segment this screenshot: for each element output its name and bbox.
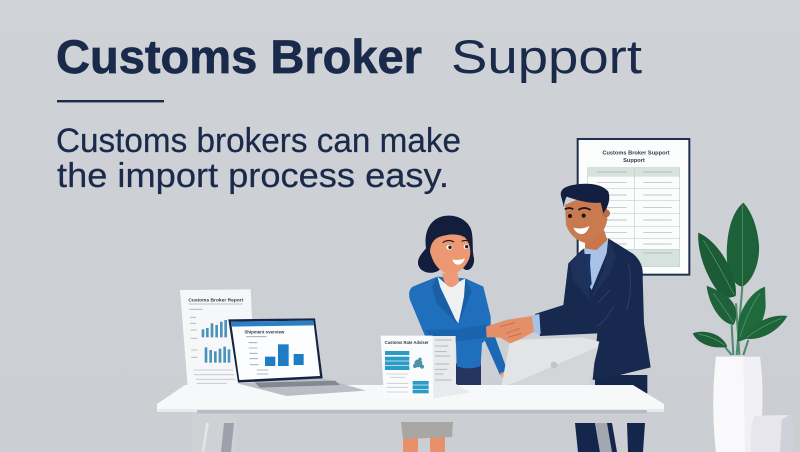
- subtitle text: the import process easy.: [57, 157, 449, 195]
- plant leaves: [727, 203, 759, 287]
- woman hand on table: [500, 371, 508, 382]
- man shirt and tie: [582, 238, 608, 290]
- report on desk with charts: [180, 289, 255, 391]
- white vase: [713, 357, 763, 452]
- man trousers: [595, 375, 647, 393]
- man face: [565, 197, 607, 243]
- woman blouse: [437, 277, 465, 323]
- table legs: [192, 412, 236, 452]
- open laptop: [228, 318, 366, 396]
- man hair: [561, 184, 609, 213]
- wall poster: [578, 139, 689, 275]
- subtitle text: [56, 122, 461, 195]
- report on desk with charts: Customs Broker Report: [188, 297, 244, 302]
- man neck: [585, 230, 607, 250]
- woman jacket: [409, 277, 491, 368]
- woman: [409, 216, 508, 385]
- man jacket: [535, 238, 651, 380]
- laptop base: [237, 378, 366, 396]
- brochure globe icon: [413, 358, 424, 369]
- title: Customs Broker: [56, 30, 422, 83]
- man: [532, 184, 651, 393]
- woman trousers: [456, 363, 481, 385]
- title: [56, 30, 642, 83]
- title: Support: [451, 30, 642, 83]
- woman smile and eyes: [452, 258, 465, 265]
- handshake: [486, 316, 534, 343]
- man lapels: [570, 248, 590, 301]
- man cuff: [532, 314, 541, 334]
- laptop screen: [228, 318, 323, 383]
- man legs: [575, 423, 645, 452]
- subtitle text: Customs brokers can make: [56, 122, 461, 160]
- desk: [157, 385, 664, 414]
- woman hair back: [418, 216, 474, 273]
- front laptop: [474, 337, 599, 392]
- laptop bar chart: [265, 344, 304, 366]
- divider rule: [57, 100, 164, 102]
- plant stems: [723, 287, 748, 355]
- woman far arm: [480, 325, 507, 375]
- brochure on desk: [381, 336, 471, 398]
- potted plant: [693, 203, 793, 452]
- brochure on desk: Customs Rate Adviser: [385, 340, 429, 345]
- small white box: [751, 415, 793, 452]
- woman face: [430, 234, 470, 274]
- wall poster: Customs Broker Support: [602, 151, 670, 157]
- woman legs and skirt: [401, 422, 453, 452]
- wall poster: Support: [623, 158, 645, 164]
- open laptop: Shipment overview: [244, 329, 285, 334]
- man smile and eyes: [573, 226, 589, 234]
